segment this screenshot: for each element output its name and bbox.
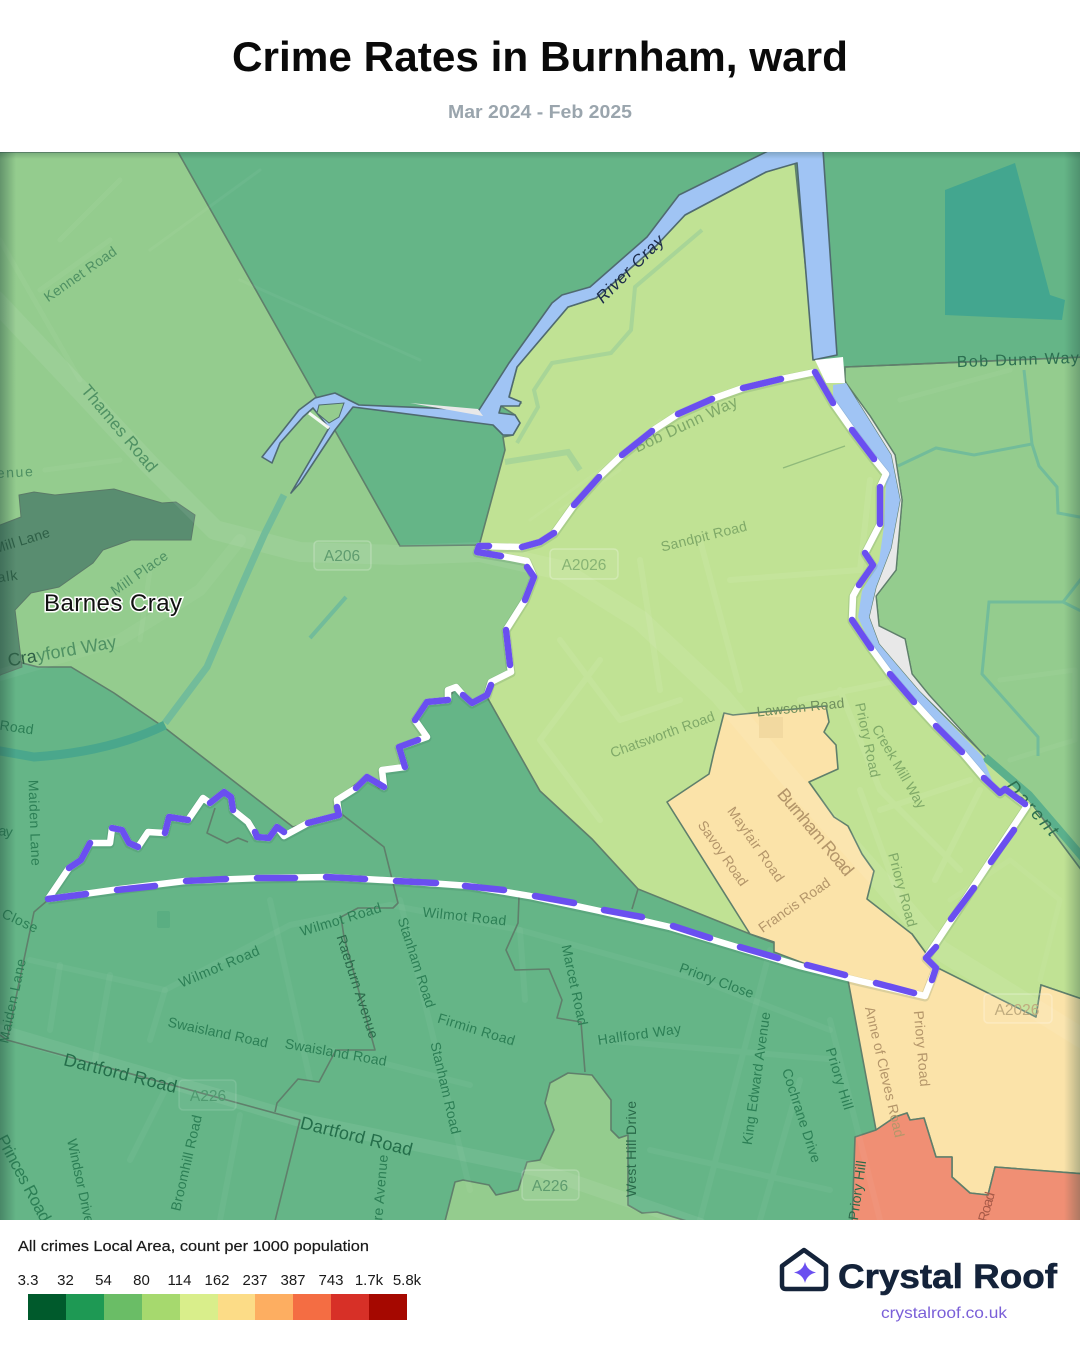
area: west light green ward xyxy=(0,152,534,827)
ward boundaries in green areas xyxy=(0,357,1080,1225)
legend scale values: 3.3 xyxy=(18,1272,38,1289)
legend xyxy=(18,1238,422,1320)
road labels: burnham: Chatsworth Road xyxy=(608,708,717,761)
road labels: south-east: Hallford Way xyxy=(597,1020,682,1048)
road labels: burnham: Darent xyxy=(1002,776,1063,841)
water label: River Cray: River Cray xyxy=(592,230,669,307)
road labels: burnham: Anne of Cleves Road xyxy=(862,1005,908,1139)
legend scale values: 162 xyxy=(204,1272,230,1289)
river Cray and Thames channel xyxy=(262,150,837,493)
road labels: burnham: Mayfair Road xyxy=(724,804,788,885)
footbridge over canal xyxy=(309,413,329,428)
icon: house with star xyxy=(782,1250,826,1289)
legend scale values: 387 xyxy=(280,1272,306,1289)
road labels: south-east: Priory Close xyxy=(677,959,756,1001)
road labels: burnham: Priory Road xyxy=(885,851,920,928)
road labels: south-west: Wilmot Road xyxy=(422,904,507,928)
legend scale values: 5.8k xyxy=(393,1272,422,1289)
road labels: south-west xyxy=(0,899,517,1225)
canal stream in dark ward xyxy=(0,725,165,757)
area: dark park west xyxy=(0,489,195,675)
area: red ward xyxy=(852,1113,1080,1225)
road labels: north-west: Kennet Road xyxy=(41,243,120,305)
road labels: burnham: Priory Road xyxy=(911,1010,933,1087)
stream north yellow ward xyxy=(517,230,702,443)
streams east xyxy=(898,370,1080,756)
grey river bank xyxy=(846,383,981,752)
road shield: A2026 north xyxy=(550,549,618,579)
road labels: burnham: Francis Road xyxy=(755,874,833,936)
road labels: south-west: Wilmot Road xyxy=(298,899,383,939)
road labels: south-east: Priory Hill xyxy=(845,1159,869,1220)
road shield: A226 west xyxy=(179,1080,236,1110)
brand logo xyxy=(780,1248,1058,1322)
small details xyxy=(157,446,845,928)
road shield: A206: A206 xyxy=(324,548,360,565)
road labels: south-west: re Avenue xyxy=(369,1154,391,1220)
legend scale values: 1.7k xyxy=(355,1272,384,1289)
road labels: burnham: Bob Dunn Way xyxy=(632,394,740,456)
road labels: south-west: Swaisland Road xyxy=(166,1014,270,1051)
road shield: A2026 south xyxy=(984,994,1052,1023)
road shield: A2026 north: A2026 xyxy=(562,557,606,574)
area: north-east yellow-green ward xyxy=(479,163,1080,1017)
road labels: north-west: Maiden Lane xyxy=(26,780,44,866)
river Darent channel lower xyxy=(985,757,1080,860)
area: south light green ward xyxy=(444,1073,700,1225)
legend title: All crimes Local Area, count per 1000 population xyxy=(18,1238,369,1255)
title: Crime Rates in Burnham, ward xyxy=(232,33,848,80)
road labels: burnham: Bob Dunn Way xyxy=(957,350,1079,371)
road shield: A226 south xyxy=(522,1170,579,1200)
legend scale values: 54 xyxy=(95,1272,112,1289)
road shield: A226 west: A226 xyxy=(190,1088,226,1105)
legend scale values xyxy=(18,1272,422,1289)
legend scale values: 237 xyxy=(242,1272,268,1289)
road labels: south-west: Firmin Road xyxy=(436,1010,517,1049)
road labels: burnham xyxy=(608,350,1079,1139)
legend colour swatches xyxy=(28,1294,407,1320)
area: tan ward xyxy=(667,706,1080,1195)
road labels: south-west: Stanham Road xyxy=(395,915,439,1010)
legend scale values: 743 xyxy=(318,1272,344,1289)
place label: Barnes Cray: Barnes Cray xyxy=(44,590,182,617)
road shield: A206 xyxy=(314,541,371,570)
road labels: south-east: King Edward Avenue xyxy=(739,1011,773,1146)
road labels: north-west xyxy=(0,243,171,866)
road labels: south-west: Swaisland Road xyxy=(284,1035,388,1069)
website url: crystalroof.co.uk xyxy=(881,1305,1008,1322)
road labels: burnham: Savoy Road xyxy=(695,817,751,889)
road labels: south-east: West Hill Drive xyxy=(623,1101,639,1197)
road labels: burnham: Priory Road xyxy=(852,701,884,779)
road labels: south-east: Cochrane Drive xyxy=(779,1066,825,1165)
road labels: burnham: Burnham Road xyxy=(773,784,858,880)
road shield: A2026 south: A2026 xyxy=(995,1002,1039,1019)
legend scale values: 32 xyxy=(57,1272,74,1289)
title xyxy=(232,33,848,122)
road network xyxy=(0,170,1080,1225)
road labels: burnham: Creek Mill Way xyxy=(869,722,930,811)
road labels: south-east: Priory Hill xyxy=(823,1046,857,1111)
legend scale values: 114 xyxy=(168,1272,191,1289)
stream branch north yellow ward xyxy=(505,452,580,470)
road shield: A226 south: A226 xyxy=(532,1178,568,1195)
area: teal patch north-east xyxy=(945,163,1065,320)
canal quay strip xyxy=(410,403,483,416)
legend scale values: 80 xyxy=(133,1272,150,1289)
road labels: south-west: Dartford Road xyxy=(62,1049,179,1097)
stream in meadow xyxy=(310,597,346,638)
road labels: north-west: Crayford Way xyxy=(6,632,118,670)
road labels: south-west: Stanham Road xyxy=(428,1040,464,1135)
base area: mid-green wards xyxy=(0,152,1080,1220)
road labels: burnham: Sandpit Road xyxy=(659,518,748,555)
road labels: south-west: Wilmot Road xyxy=(176,942,262,991)
road labels: south-west: Close xyxy=(0,905,41,936)
road labels: south-west: Broomhill Road xyxy=(167,1113,205,1212)
wordmark: Crystal Roof xyxy=(838,1258,1058,1296)
title: Mar 2024 - Feb 2025 xyxy=(448,101,632,122)
ward boundary: Burnham dashed outline xyxy=(48,372,1027,997)
bridge crossing xyxy=(815,357,845,383)
road labels: south-east xyxy=(559,943,998,1223)
road labels: south-west: Dartford Road xyxy=(298,1113,415,1160)
road labels: north-west: Mill Place xyxy=(108,547,171,598)
map edge vignette xyxy=(0,152,1080,1220)
choropleth map xyxy=(0,152,1080,1220)
canal stream west xyxy=(165,495,284,723)
area: east light green ward xyxy=(845,357,1080,875)
canal island xyxy=(317,403,344,423)
road labels: south-west: Raeburn Avenue xyxy=(333,933,382,1040)
road labels: south-east: Marcet Road xyxy=(559,943,591,1027)
road labels: burnham: Lawson Road xyxy=(756,694,845,720)
road labels: north-west: Thames Road xyxy=(77,381,161,476)
river Cray lower reach xyxy=(833,383,995,787)
